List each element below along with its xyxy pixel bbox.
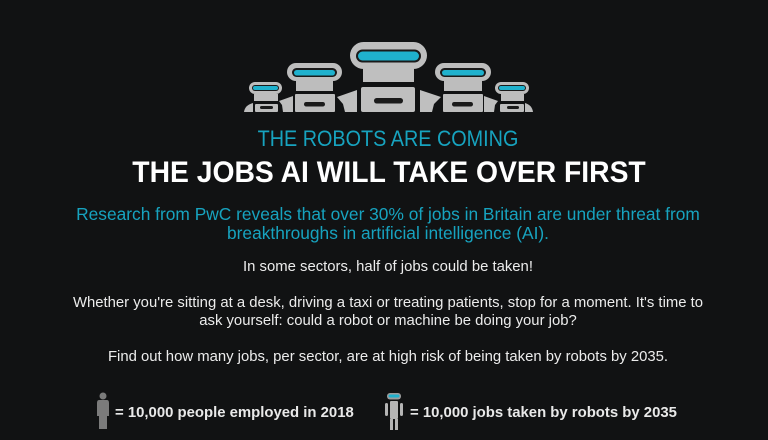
intro paragraph (76, 204, 700, 243)
text: find out: Find out how many jobs, per sector, are at high risk of being taken by robots by 2035. (108, 349, 668, 365)
robot: inner right (435, 63, 498, 112)
intro paragraph: Research from PwC reveals that over 30% of jobs in Britain are under threat from (76, 204, 700, 224)
robot: far right (495, 82, 533, 112)
illustration: row of five robots (244, 42, 533, 112)
robot: centre (337, 42, 441, 112)
legend label: people: = 10,000 people employed in 2018 (115, 405, 354, 421)
text: half of jobs: In some sectors, half of jobs could be taken! (243, 258, 533, 274)
legend label: robots: = 10,000 jobs taken by robots by 2035 (410, 405, 677, 421)
text: could a robot do your job (73, 294, 703, 328)
robot: inner left (279, 63, 342, 112)
robot: far left (244, 82, 282, 112)
title: THE JOBS AI WILL TAKE OVER FIRST (132, 156, 645, 189)
intro paragraph: breakthroughs in artificial intelligence (AI). (227, 223, 549, 243)
text: could a robot do your job: ask yourself: could a robot or machine be doing your job? (199, 312, 577, 328)
subtitle: THE ROBOTS ARE COMING (257, 126, 518, 151)
text: could a robot do your job: Whether you're sitting at a desk, driving a taxi or treating patients, stop for a moment. It's time to (73, 294, 703, 310)
